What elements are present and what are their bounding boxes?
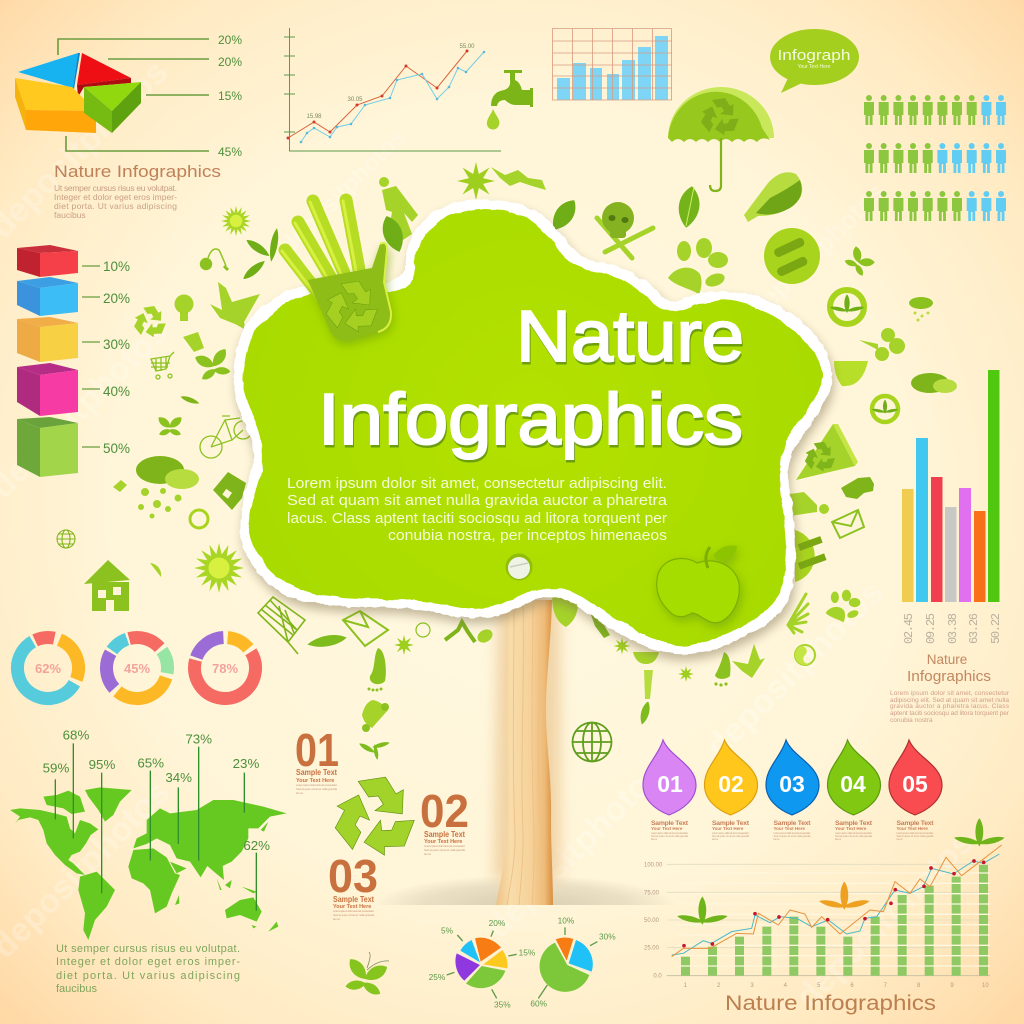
tree trunk	[375, 600, 675, 905]
icon: skull and crossbones	[597, 202, 653, 258]
3D pie chart with percentages: 45%	[218, 145, 242, 159]
watermarks: depositphotos	[789, 823, 981, 1016]
watermarks: depositphotos	[275, 123, 411, 259]
icon: star bottom	[394, 635, 414, 655]
icon: leaf by person	[378, 213, 408, 255]
donut chart 62%: 62%	[35, 661, 61, 676]
icon: leaf by top	[546, 195, 582, 235]
icon: star	[457, 162, 495, 200]
icon: shopping cart	[151, 352, 174, 379]
numbered list: 02: Your Text Here	[424, 839, 462, 845]
icon: yin yang	[791, 644, 815, 669]
drop captions: Sed at quam sit amet nulla gravida	[835, 834, 873, 838]
drop captions: Your Text Here	[712, 826, 744, 831]
icon: pin	[506, 554, 532, 580]
heading and text: right: gravida auctor a pharetra lacus. Class	[890, 703, 1010, 710]
combo chart: bars and lines: 50.00	[644, 918, 660, 924]
icon: circle with bars	[795, 530, 827, 582]
icon: bicycle	[200, 416, 252, 458]
pie chart left: 35%	[494, 1000, 511, 1010]
icon: recycle bin	[796, 424, 858, 480]
heading and text: top left	[54, 162, 221, 220]
world map with percentages: 68%	[63, 727, 89, 742]
pie chart right	[530, 915, 616, 1009]
drop captions: Your Text Here	[774, 826, 805, 831]
watermarks: depositphotos	[479, 753, 671, 946]
drop captions: lacus	[896, 837, 903, 841]
icon: green sprout right	[953, 818, 1005, 846]
pie chart left: 15%	[519, 947, 536, 957]
icon: leaf in cycle 2	[871, 396, 899, 422]
pictogram: people rows	[864, 95, 1006, 221]
icon: small sun top	[216, 201, 256, 241]
world map with percentages: 59%	[43, 761, 69, 776]
world map with percentages: 23%	[233, 756, 259, 771]
3D stacked cubes with percentages: 50%	[103, 441, 130, 456]
drop captions: Lorem ipsum dolor sit amet consectetur	[774, 831, 811, 835]
combo chart: bars and lines: 4	[784, 983, 788, 989]
text block: map caption: Integer et dolor eget eros imper-	[56, 956, 240, 968]
text block: sign description: conubia nostra, per inceptos himenaeos	[388, 528, 667, 544]
line chart	[284, 28, 501, 151]
text block: map caption	[56, 943, 240, 995]
drop captions: Lorem ipsum dolor sit amet consectetur	[835, 831, 872, 835]
icon: small leaf	[180, 394, 200, 406]
combo chart: bars and lines: 9	[950, 983, 954, 989]
numbered list: 01: Sample Text	[296, 768, 337, 777]
icon: rain cloud small	[909, 297, 933, 322]
vertical bar chart right: 03.38	[946, 613, 960, 644]
text block: sign description: lacus. Class aptent taciti sociosqu ad litora torquent per	[287, 511, 667, 527]
combo chart: bars and lines: 0.0	[653, 974, 662, 980]
speech bubble: Infograph	[770, 29, 859, 93]
world map with percentages: 34%	[165, 770, 192, 785]
icon: half leaf	[834, 361, 868, 386]
drop captions: lacus	[774, 837, 780, 841]
numbered list: 01: Your Text Here	[296, 778, 334, 784]
icon: sprout leaves	[241, 228, 280, 282]
world map with percentages	[10, 727, 287, 940]
icon: small umbrella	[150, 563, 161, 577]
numbered list: 03: Lorem ipsum dolor sit amet consectetur	[333, 909, 374, 913]
donut chart 62%	[6, 626, 90, 710]
numbered list: 02: lacus	[424, 852, 432, 856]
line chart: 55.00	[459, 44, 475, 50]
combo chart: bars and lines: 10	[982, 983, 989, 989]
vertical bar chart right: 50.22	[989, 613, 1003, 644]
vertical bar chart right: 02.45	[902, 613, 916, 644]
icon: hand with recycle	[282, 200, 391, 341]
icon: trumpet flower	[859, 328, 905, 361]
drop captions: Your Text Here	[896, 826, 928, 831]
icon: paw right	[826, 590, 860, 622]
heading and text: top left: Integer et dolor eget eros imper-	[54, 192, 177, 202]
icon: recycling umbrella	[668, 87, 774, 191]
3D pie chart with percentages	[15, 33, 242, 159]
drop captions: Sample Text	[712, 820, 750, 827]
leaf drops 01 to 05: 04	[840, 771, 866, 797]
leaf drops 01 to 05: 05	[902, 771, 928, 797]
drop captions: lacus	[712, 837, 719, 841]
combo chart: bars and lines: 6	[850, 983, 854, 989]
numbered list: 03: lacus	[333, 917, 341, 921]
icon: butterfly bottom	[340, 952, 392, 999]
3D pie chart with percentages: 20%	[218, 33, 242, 47]
leaf drops 01 to 05: 03	[779, 771, 805, 797]
drop captions: Your Text Here	[835, 826, 867, 831]
drop captions: lacus	[651, 837, 658, 841]
icon: star 3	[678, 666, 694, 682]
speech bubble: Infograph: Your Text Here	[798, 64, 831, 70]
icon: house small	[213, 472, 246, 510]
pie chart right: 30%	[599, 931, 616, 941]
icon: cloud	[911, 373, 957, 393]
drop captions: Sample Text	[774, 820, 811, 827]
donut chart 78%	[183, 626, 267, 710]
icon: small leaf 2	[638, 700, 652, 726]
title	[318, 297, 744, 460]
numbered list: 02: Lorem ipsum dolor sit amet consectetur	[424, 844, 465, 848]
icon: recycling arrows	[326, 777, 418, 862]
leaf drops 01 to 05: 02	[718, 771, 744, 797]
icon: butterfly lower	[156, 415, 184, 437]
drop captions: Sample Text	[896, 820, 934, 827]
line chart: 15.98	[306, 114, 322, 120]
chart heading: Nature Infographics	[725, 992, 936, 1015]
icon: sprout	[358, 741, 390, 760]
drop captions: Sed at quam sit amet nulla gravida	[712, 834, 750, 838]
text block: sign description: Sed at quam sit amet nulla gravida auctor a pharetra	[287, 493, 668, 509]
icon: small plug	[113, 480, 127, 492]
watermarks: depositphotos	[699, 573, 891, 766]
drop captions: lacus	[835, 837, 842, 841]
world map with percentages: 62%	[243, 838, 270, 853]
icon: butterfly left	[191, 345, 235, 384]
pie chart right: 10%	[558, 915, 575, 925]
icon: green sprout left	[676, 896, 728, 925]
donut chart 45%: 45%	[124, 661, 150, 676]
icon: car	[362, 700, 389, 732]
combo chart: bars and lines: 100.00	[644, 863, 663, 869]
numbered list: 02: Sample Text	[424, 830, 465, 839]
drop captions: Lorem ipsum dolor sit amet consectetur	[896, 831, 934, 835]
icon: small bike	[416, 623, 430, 637]
3D stacked cubes with percentages: 30%	[103, 337, 130, 352]
icon: globe	[572, 722, 612, 762]
icon: big sun	[186, 535, 252, 601]
icon: water tap with drop	[487, 70, 533, 130]
icon: small umbrella 2	[633, 652, 659, 664]
icon: foot	[368, 648, 386, 692]
drop captions: Sed at quam sit amet nulla gravida	[896, 834, 934, 838]
3D pie chart with percentages: 20%	[218, 55, 242, 69]
combo chart: bars and lines: 8	[917, 983, 921, 989]
3D stacked cubes with percentages	[17, 245, 130, 477]
icon: leaf bottom	[306, 632, 348, 650]
numbered list: 02: Sed at quam sit amet nulla gravida	[424, 848, 465, 852]
combo chart: bars and lines: 1	[684, 983, 688, 989]
icon: cup bin	[183, 332, 204, 352]
combo chart: bars and lines: 75.00	[644, 891, 660, 897]
drop captions: Lorem ipsum dolor sit amet consectetur	[712, 831, 749, 835]
numbered list: 01	[295, 724, 339, 795]
icon: star 2	[614, 638, 630, 654]
world map with percentages: 73%	[185, 731, 212, 746]
drop captions	[651, 820, 934, 841]
heading and text: right: aptent taciti sociosqu ad litora torquent per	[890, 710, 1010, 717]
icon: lying person	[790, 492, 829, 516]
icon: equal circle badge	[764, 228, 820, 284]
combo chart: bars and lines	[644, 818, 1005, 989]
icon: apple	[657, 545, 739, 623]
numbered list: 01: Lorem ipsum dolor sit amet consectetur	[296, 783, 337, 787]
numbered list: 03: Sed at quam sit amet nulla gravida	[333, 913, 374, 917]
text block: sign description	[287, 476, 668, 544]
donut chart 78%: 78%	[212, 661, 238, 676]
world map with percentages: 65%	[137, 755, 164, 770]
icon: rain cloud left	[136, 456, 199, 518]
drop captions: Sample Text	[651, 820, 689, 827]
text block: map caption: faucibus	[56, 983, 97, 995]
vertical bar chart right	[902, 370, 1003, 644]
numbered list: 01: Sed at quam sit amet nulla gravida	[296, 787, 337, 791]
icon: butterfly right	[840, 242, 879, 280]
pie chart right: 60%	[530, 999, 548, 1009]
icon: foot 2	[714, 652, 730, 687]
icon: pill recycle	[552, 596, 578, 627]
heading and text: right: Lorem ipsum dolor sit amet, consectetur	[890, 690, 1010, 697]
icon: leaf in cycle	[829, 290, 865, 324]
3D stacked cubes with percentages: 10%	[103, 259, 130, 274]
icon: leaf light bulb	[744, 172, 802, 222]
vertical bar chart right: 09.25	[924, 613, 938, 644]
icon: house big	[84, 560, 130, 611]
combo chart: bars and lines: 25.00	[644, 946, 660, 952]
combo chart: bars and lines: 7	[884, 983, 888, 989]
icon: recycle left	[131, 306, 167, 340]
drop captions: Sample Text	[835, 820, 873, 827]
3D pie chart with percentages: 15%	[218, 89, 242, 103]
icon: person top	[379, 177, 418, 240]
icons behind the sign: scattered eco icons around the tree	[57, 162, 957, 762]
numbered list: 01: lacus	[296, 791, 304, 795]
drop captions: Lorem ipsum dolor sit amet consectetur	[651, 831, 688, 835]
icon: bird left	[210, 282, 260, 330]
title: Infographics	[318, 380, 743, 460]
title: Nature	[516, 297, 744, 377]
combo chart: bars and lines: 2	[717, 983, 721, 989]
text block: sign description: Lorem ipsum dolor sit amet, consectetur adipiscing elit.	[287, 476, 667, 492]
heading and text: right	[890, 652, 1010, 724]
heading and text: right: conubia nostra	[890, 717, 933, 724]
icon: zigzag leaf	[491, 167, 546, 190]
pie chart left: 20%	[489, 918, 506, 928]
3D stacked cubes with percentages: 20%	[103, 291, 130, 306]
pie chart left: 5%	[441, 925, 454, 935]
icon: small hand	[841, 477, 874, 499]
text block: map caption: diet porta. Ut varius adipiscing	[56, 970, 240, 982]
heading and text: right: Infographics	[907, 669, 991, 685]
icon: bulb	[174, 294, 194, 321]
leaf drops 01 to 05	[643, 740, 942, 815]
icon: bird 2	[732, 644, 765, 678]
3D stacked cubes with percentages: 40%	[103, 384, 130, 399]
icon: brush	[644, 670, 653, 699]
numbered list: 01: 01	[295, 724, 339, 776]
icon: solar panel	[258, 597, 305, 654]
heading and text: top left: Nature Infographics	[54, 162, 221, 181]
numbered list: 03: Your Text Here	[333, 904, 371, 910]
icon: fan shell	[788, 594, 808, 633]
panel: torn paper sign	[234, 200, 834, 660]
numbered list: 03: 03	[328, 850, 378, 902]
icon: envelope bottom	[343, 611, 388, 646]
icon: orange sprout	[818, 881, 870, 910]
icon: key	[590, 612, 610, 638]
leaf drops 01 to 05: 01	[657, 771, 683, 797]
line chart: 30.05	[347, 97, 363, 103]
icon: envelope	[832, 510, 864, 538]
numbered list: 02: 02	[420, 785, 469, 837]
drop captions: Your Text Here	[651, 826, 683, 831]
combo chart: bars and lines: 3	[750, 983, 754, 989]
icon: plug	[200, 249, 228, 270]
world map with percentages: 95%	[89, 757, 115, 772]
heading and text: top left: diet porta. Ut varius adipiscing	[54, 201, 177, 211]
heading and text: top left: Ut semper cursus risus eu volutpat.	[54, 183, 177, 193]
speech bubble: Infograph: Infograph	[778, 47, 850, 64]
pie chart left	[429, 918, 536, 1010]
bar chart with grid	[552, 28, 672, 100]
text block: map caption: Ut semper cursus risus eu volutpat.	[56, 943, 240, 955]
watermarks: depositphotos	[743, 176, 891, 324]
icon: paw	[668, 238, 728, 294]
heading and text: right: Nature	[927, 652, 967, 667]
vertical bar chart right: 63.26	[967, 613, 981, 644]
heading and text: right: adipiscing elit. Sed at quam sit amet nulla	[890, 697, 1009, 704]
icon: leaf	[676, 185, 702, 229]
pie chart left: 25%	[429, 972, 446, 982]
numbered list: 03: Sample Text	[333, 895, 374, 904]
icon: cycle badge	[190, 510, 208, 528]
icon: pipe and leaf	[445, 622, 495, 645]
donut chart 45%	[94, 625, 180, 711]
drop captions: Sed at quam sit amet nulla gravida	[651, 834, 689, 838]
drop captions: Sed at quam sit amet nulla gravida	[774, 834, 811, 838]
icon: small globe	[57, 530, 75, 548]
heading and text: top left: faucibus	[54, 210, 86, 220]
combo chart: bars and lines: 5	[817, 983, 821, 989]
